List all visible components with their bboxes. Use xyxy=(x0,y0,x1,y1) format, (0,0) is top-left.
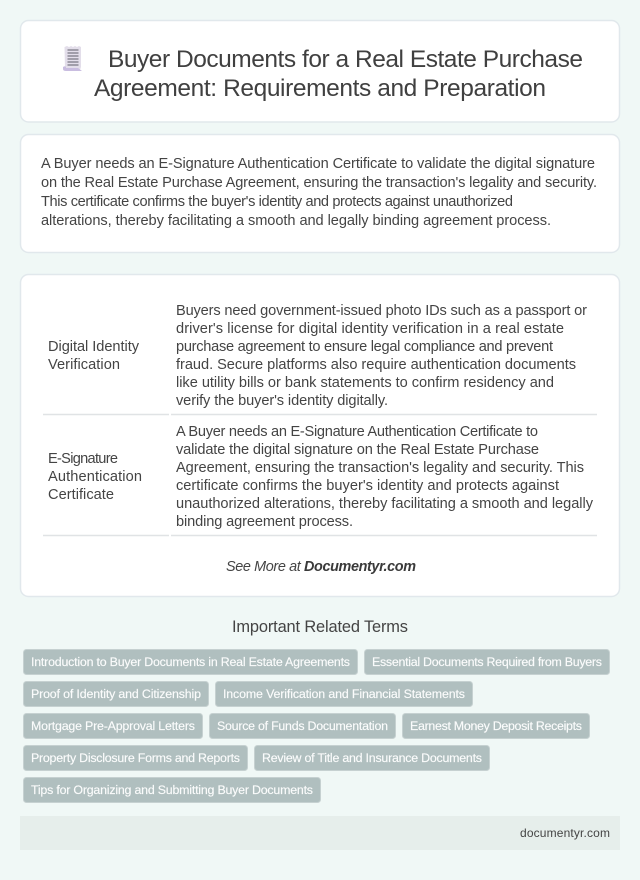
panel: summary xyxy=(20,134,620,252)
row description: like utility bills or bank statements to confirm residency and xyxy=(176,375,554,391)
row description: Agreement, ensuring the transaction's legality and security. This xyxy=(176,460,584,476)
chip: Tips for Organizing and Submitting Buyer Documents xyxy=(31,783,313,797)
summary text: This certificate confirms the buyer's identity and protects against unauthorized xyxy=(41,194,513,210)
icon: document scroll xyxy=(63,46,82,71)
chip xyxy=(216,682,472,706)
row description xyxy=(176,424,594,530)
row description: purchase agreement to ensure legal compliance and prevent xyxy=(176,339,553,355)
row label: Verification xyxy=(48,357,120,373)
chip xyxy=(254,746,490,770)
row description: verify the buyer's identity digitally. xyxy=(176,393,388,409)
panel: header xyxy=(20,20,620,122)
row description: driver's license for digital identity verification in a real estate xyxy=(176,321,564,337)
row description: validate the digital signature on the Real Estate Purchase xyxy=(176,442,539,458)
summary text: alterations, thereby facilitating a smooth and legally binding agreement process. xyxy=(41,213,551,229)
summary text: A Buyer needs an E-Signature Authentication Certificate to validate the digital signature xyxy=(41,156,595,172)
chip: Income Verification and Financial Statements xyxy=(223,687,465,701)
chip xyxy=(24,714,202,738)
chip xyxy=(24,778,320,802)
panel: document table xyxy=(20,274,620,596)
heading: related terms: Important Related Terms xyxy=(232,618,408,636)
row description: Buyers need government-issued photo IDs such as a passport or xyxy=(176,303,587,319)
summary text: on the Real Estate Purchase Agreement, ensuring the transaction's legality and security. xyxy=(41,175,597,191)
title: Agreement: Requirements and Preparation xyxy=(94,75,546,102)
row label: E-Signature xyxy=(48,451,118,467)
summary text xyxy=(41,156,597,229)
row: Digital Identity Verification xyxy=(48,303,587,409)
chip xyxy=(24,682,208,706)
chip xyxy=(24,746,248,770)
row: E-Signature Authentication Certificate xyxy=(48,424,594,530)
chip: Essential Documents Required from Buyers xyxy=(372,655,602,669)
row label: Authentication xyxy=(48,469,142,485)
row description: binding agreement process. xyxy=(176,514,353,530)
row label: Certificate xyxy=(48,487,114,503)
title: Buyer Documents for a Real Estate Purchase xyxy=(108,46,583,73)
chip xyxy=(24,650,358,674)
row description xyxy=(176,303,587,409)
row label xyxy=(48,451,142,503)
footer xyxy=(20,816,620,850)
chip: Property Disclosure Forms and Reports xyxy=(31,751,240,765)
chip: Mortgage Pre-Approval Letters xyxy=(31,719,195,733)
chip: Review of Title and Insurance Documents xyxy=(262,751,482,765)
row description: A Buyer needs an E-Signature Authentication Certificate to xyxy=(176,424,538,440)
title xyxy=(94,46,583,102)
chip: Proof of Identity and Citizenship xyxy=(31,687,201,701)
chip: Earnest Money Deposit Receipts xyxy=(410,719,582,733)
chip xyxy=(210,714,396,738)
row description: certificate confirms the buyer's identity and protects against xyxy=(176,478,559,494)
row label: Digital Identity xyxy=(48,339,140,355)
chip xyxy=(364,650,610,674)
row description: unauthorized alterations, thereby facilitating a smooth and legally xyxy=(176,496,594,512)
chip: Introduction to Buyer Documents in Real Estate Agreements xyxy=(31,655,350,669)
chip xyxy=(402,714,590,738)
row label xyxy=(48,339,140,373)
row description: fraud. Secure platforms also require authentication documents xyxy=(176,357,576,373)
footer: documentyr.com xyxy=(520,826,610,840)
see more link: See More at Documentyr.com xyxy=(226,559,416,575)
chip: Source of Funds Documentation xyxy=(217,719,388,733)
related term chips xyxy=(24,650,610,802)
